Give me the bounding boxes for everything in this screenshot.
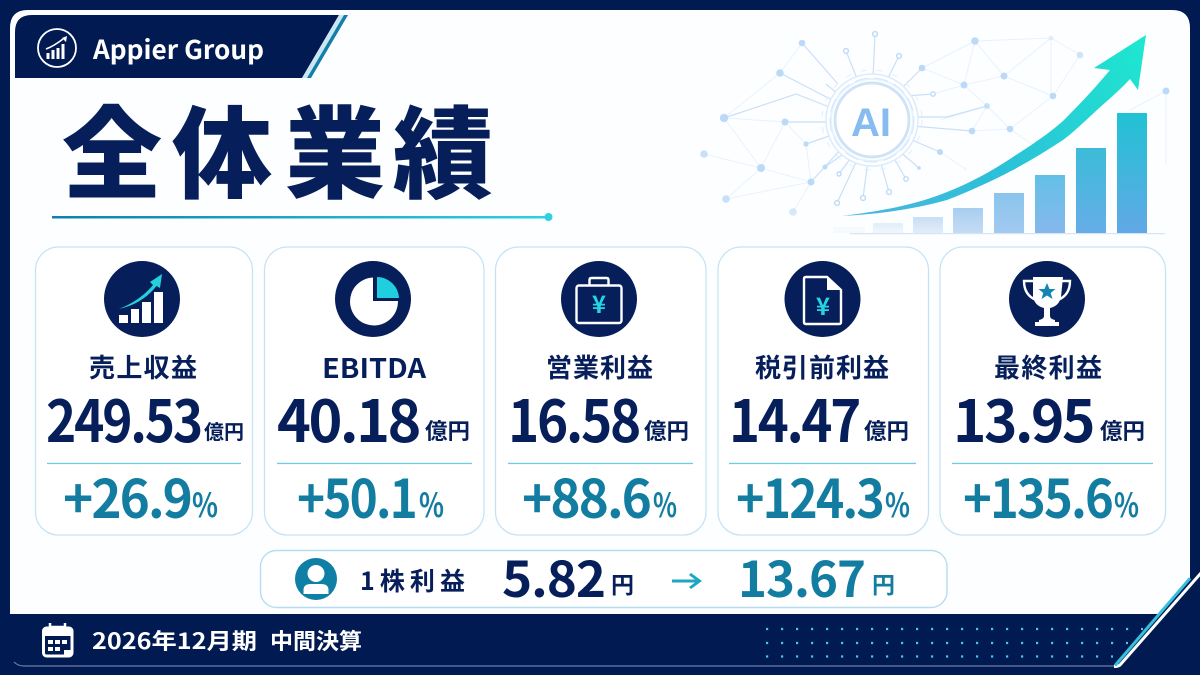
panel: 最終利益 xyxy=(940,247,1166,535)
after value: 13.67 xyxy=(738,541,865,612)
panel: 営業利益 xyxy=(496,247,706,535)
value: 億円 xyxy=(644,414,689,446)
change: % xyxy=(1114,479,1139,527)
period text: 中間決算 xyxy=(270,624,362,656)
AI label: AI xyxy=(851,101,891,145)
icon: trophy with star xyxy=(1009,261,1085,337)
before value: 円 xyxy=(611,566,634,600)
rising arrow xyxy=(842,35,1146,216)
brand name: Appier Group xyxy=(92,30,264,67)
arrow xyxy=(672,573,702,589)
title underline xyxy=(52,213,552,221)
title: 全体業績 xyxy=(62,74,493,219)
value: 249.53 xyxy=(46,375,201,459)
label: 営業利益 xyxy=(546,348,653,385)
panel: EBITDA xyxy=(264,247,484,535)
AI ring xyxy=(822,70,922,170)
top-left brand banner xyxy=(15,15,348,78)
value: 40.18 xyxy=(277,375,419,459)
footer band xyxy=(10,614,1159,666)
panel: 税引前利益 xyxy=(718,247,928,535)
AI network illustration xyxy=(700,32,1170,216)
label: 最終利益 xyxy=(994,348,1102,385)
value: 億円 xyxy=(864,414,909,446)
label: 売上収益 xyxy=(89,348,197,385)
icon: document with yen xyxy=(784,261,860,337)
after value: 円 xyxy=(872,566,895,600)
change: +135.6 xyxy=(963,458,1113,534)
panel: earnings per share xyxy=(260,541,947,612)
before value: 5.82 xyxy=(502,541,605,612)
change: +26.9 xyxy=(63,458,191,534)
value: 14.47 xyxy=(729,375,859,459)
icon: person xyxy=(295,558,337,600)
period text: 2026年12月期 xyxy=(92,624,257,656)
value: 13.95 xyxy=(953,375,1093,459)
icon: briefcase with yen xyxy=(561,261,637,337)
icon: growth chart logo xyxy=(38,29,76,67)
label: 1株利益 xyxy=(360,562,465,598)
value: 億円 xyxy=(425,414,470,446)
icon: pie chart xyxy=(335,261,411,337)
change: +124.3 xyxy=(736,458,883,534)
change: % xyxy=(653,479,677,527)
icon: briefcase with yen: ¥ xyxy=(592,285,606,320)
label: EBITDA xyxy=(322,347,427,386)
bottom-right diagonal accent xyxy=(1114,573,1200,666)
icon: rising bars xyxy=(104,261,180,337)
panel: 売上収益 xyxy=(36,247,252,535)
value: 億円 xyxy=(204,416,244,445)
growth bar chart xyxy=(833,113,1165,234)
icon: document with yen: ¥ xyxy=(816,287,830,322)
change: % xyxy=(885,479,910,527)
value: 億円 xyxy=(1100,414,1145,446)
change: % xyxy=(419,479,444,527)
change: % xyxy=(192,479,218,527)
change: +88.6 xyxy=(522,458,651,534)
icon: calendar xyxy=(44,623,72,656)
label: 税引前利益 xyxy=(755,348,889,385)
value: 16.58 xyxy=(508,375,639,459)
change: +50.1 xyxy=(297,458,416,534)
